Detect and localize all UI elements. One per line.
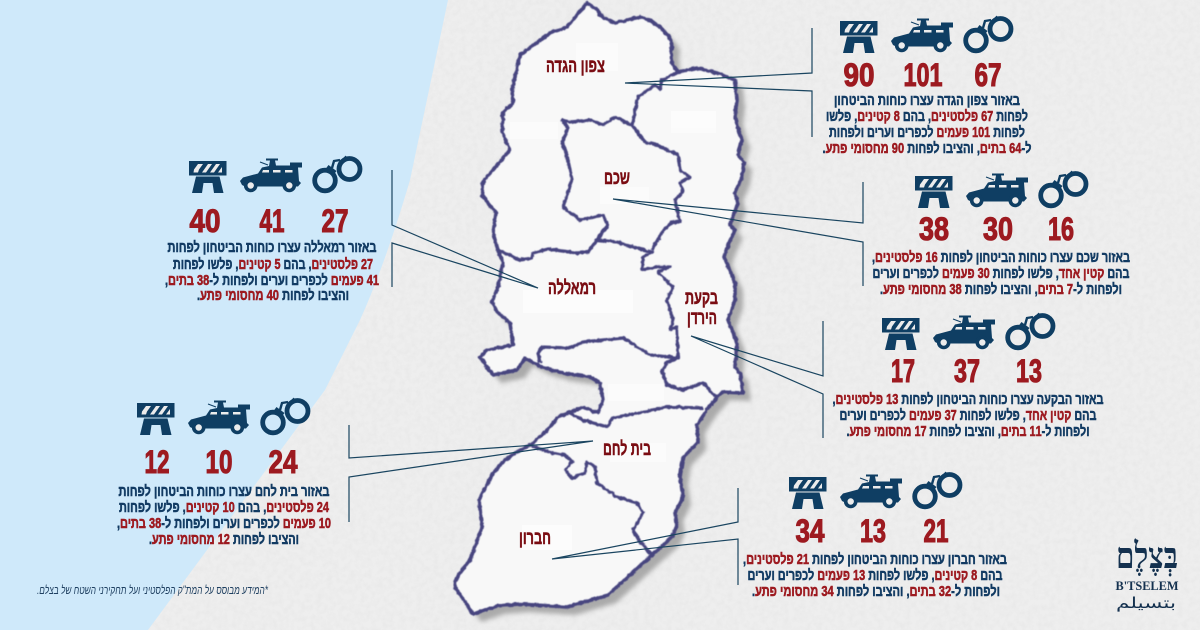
map label: Bethlehem: בית לחם: [603, 439, 651, 460]
map label: Jordan Valley: בקעת: [685, 288, 718, 309]
panel: north West Bank: [822, 17, 1032, 157]
description text: 41 פעמים לכפרים וערים ולפחות ל-38 בתים,: [165, 273, 379, 289]
leader lines: Hebron: [552, 488, 738, 585]
numbers: [919, 211, 1074, 247]
numbers: 41: [260, 203, 284, 239]
icons: checkpoint, vehicle, handcuffs: [789, 473, 960, 509]
description text: 24 פלסטינים, בהם 10 קטינים, פלשו לפחות: [119, 500, 329, 516]
numbers: 40: [190, 203, 220, 239]
description text: והציבו לפחות 40 מחסומי פתע.: [197, 288, 349, 304]
icons: checkpoint, vehicle, handcuffs: [137, 399, 308, 435]
description text: [165, 240, 379, 304]
numbers: 10: [206, 444, 232, 480]
logo: B'Tselem: [1116, 536, 1179, 612]
description text: [833, 392, 1104, 440]
map label: Hebron: חברון: [519, 528, 551, 549]
leader lines: Ramallah: [392, 170, 538, 288]
description text: [822, 93, 1032, 157]
logo: B'Tselem: بتسيلم: [1116, 594, 1176, 612]
map label: Ramallah: רמאללה: [548, 278, 596, 299]
description text: באזור הבקעה עצרו כוחות הביטחון לפחות 13 פלסטינים,: [833, 392, 1104, 408]
description text: [117, 484, 331, 548]
map label: Jordan Valley: הירדן: [687, 308, 717, 329]
numbers: 38: [919, 211, 949, 247]
description text: בהם קטין אחד, פלשו לפחות 30 פעמים לכפרים וערים: [872, 266, 1130, 282]
numbers: 90: [844, 57, 874, 93]
description text: [743, 552, 1007, 600]
numbers: [190, 203, 348, 239]
icons: checkpoint, vehicle, handcuffs: [915, 172, 1086, 208]
description text: באזור שכם עצרו כוחות הביטחון לפחות 16 פלסטינים,: [872, 250, 1130, 266]
panel: Nablus: [872, 172, 1130, 298]
leader lines: Bethlehem: [349, 425, 593, 522]
numbers: 34: [796, 513, 825, 549]
description text: ל-64 בתים, והציבו לפחות 90 מחסומי פתע.: [822, 141, 1032, 157]
map label: Nablus: שכם: [604, 168, 630, 189]
leader lines: north West Bank: [625, 28, 812, 137]
description text: ולפחות ל-32 בתים, והציבו לפחות 34 מחסומי פתע.: [752, 584, 1000, 600]
map label: Jordan Valley: [685, 288, 718, 329]
description text: לפחות 101 פעמים לכפרים וערים ולפחות: [829, 125, 1025, 141]
numbers: 24: [268, 444, 298, 480]
description text: 10 פעמים לכפרים וערים ולפחות ל-38 בתים,: [117, 516, 331, 532]
description text: 27 פלסטינים, בהם 5 קטינים, פלשו לפחות: [173, 257, 373, 273]
numbers: [144, 444, 298, 480]
numbers: 37: [954, 353, 980, 389]
numbers: 12: [144, 444, 170, 480]
panel: Jordan Valley: [833, 314, 1104, 440]
map borders: [455, 3, 744, 614]
description text: [872, 250, 1130, 298]
numbers: [891, 353, 1042, 389]
numbers: [844, 57, 1002, 93]
leader lines: Nablus: [613, 182, 863, 286]
description text: באזור בית לחם עצרו כוחות הביטחון לפחות: [118, 484, 330, 500]
logo: B'Tselem: בְּצֶלֶם: [1116, 536, 1178, 577]
logo: B'Tselem: B'TSELEM: [1116, 579, 1179, 593]
description text: ולפחות ל-7 בתים, והציבו לפחות 38 מחסומי פתע.: [880, 282, 1122, 298]
numbers: 13: [1016, 353, 1042, 389]
numbers: 13: [860, 513, 886, 549]
numbers: 67: [974, 57, 1002, 93]
panel: Bethlehem: [117, 399, 331, 548]
description text: לפחות 67 פלסטינים, בהם 8 קטינים, פלשו: [826, 109, 1028, 125]
description text: בהם קטין אחד, פלשו לפחות 37 פעמים לכפרים וערים: [840, 408, 1096, 424]
numbers: 17: [891, 353, 915, 389]
background: sea: [0, 0, 448, 630]
map label: north West Bank: צפון הגדה: [546, 56, 605, 77]
panel: Hebron: [743, 473, 1007, 600]
description text: באזור צפון הגדה עצרו כוחות הביטחון: [834, 93, 1020, 109]
icons: checkpoint, vehicle, handcuffs: [840, 17, 1011, 53]
numbers: [796, 513, 948, 549]
footnote: *המידע מבוסס על המת"ק הפלסטיני ועל תחקירני השטח של בצלם.: [37, 584, 268, 597]
numbers: 30: [983, 211, 1013, 247]
numbers: 27: [322, 203, 348, 239]
map of the West Bank: [455, 3, 752, 622]
panel: Ramallah: [165, 157, 379, 304]
numbers: 16: [1048, 211, 1074, 247]
leader lines: Jordan Valley: [691, 321, 823, 438]
description text: והציבו לפחות 12 מחסומי פתע.: [149, 532, 299, 548]
description text: בהם 8 קטינים, פלשו לפחות 13 פעמים לכפרים וערים: [748, 568, 1002, 584]
icons: checkpoint, vehicle, handcuffs: [882, 314, 1053, 350]
description text: באזור חברון עצרו כוחות הביטחון לפחות 21 פלסטינים,: [743, 552, 1007, 568]
map highlight patches: [510, 43, 716, 550]
description text: ולפחות ל-11 בתים, והציבו לפחות 17 מחסומי פתע.: [846, 424, 1089, 440]
icons: checkpoint, vehicle, handcuffs: [189, 157, 360, 193]
numbers: 21: [924, 513, 948, 549]
numbers: 101: [904, 57, 942, 93]
description text: באזור רמאללה עצרו כוחות הביטחון לפחות: [168, 240, 376, 256]
